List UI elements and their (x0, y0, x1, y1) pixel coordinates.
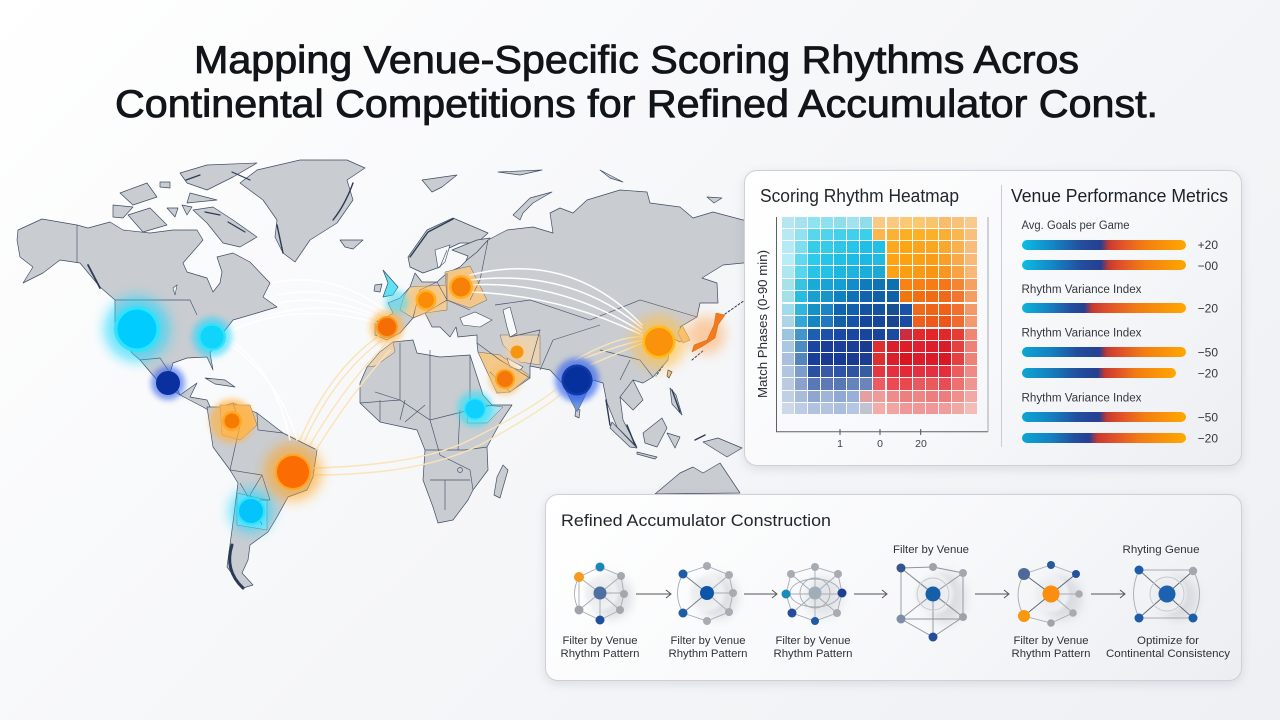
metric bar: avg goals 1 (1022, 240, 1186, 250)
metric bar: rhythm variance 4 (1022, 412, 1186, 422)
marker: India (555, 358, 599, 402)
step labels: Filter by Venue (1014, 635, 1088, 647)
heatmap axis tick labels: 0 (877, 438, 883, 450)
metric labels (1022, 220, 1142, 404)
heading: venue performance metrics: Venue Performance Metrics (1011, 186, 1228, 206)
marker: eastern USA (192, 317, 232, 357)
marker: Argentina (229, 489, 273, 533)
network icon 3 (782, 563, 846, 625)
step labels: Rhythm Pattern (774, 648, 852, 660)
marker: Brazil (264, 443, 322, 501)
marker: Poland (446, 272, 476, 302)
heatmap grid (782, 217, 977, 414)
network icon 1 (574, 562, 632, 624)
heatmap y axis label: Match Phases (0-90 min) (756, 250, 770, 398)
marker: Ethiopia (457, 391, 493, 427)
title: Mapping Venue-Specific Scoring Rhythms Acros (194, 39, 1079, 82)
marker: Iran (505, 340, 529, 364)
title: Continental Competitions for Refined Accumulator Const. (115, 83, 1158, 126)
metric values: −50 (1198, 410, 1218, 424)
network icon 5 (1018, 561, 1083, 627)
heatmap axis tick labels: 1 (837, 438, 843, 450)
arrow 5 (1091, 590, 1125, 598)
metric labels: Rhythm Variance Index (1022, 328, 1142, 340)
marker: United Kingdom and France glow (385, 290, 409, 314)
step labels: Continental Consistency (1106, 648, 1231, 660)
metric values: −50 (1198, 346, 1218, 360)
title (115, 39, 1158, 126)
metric bar: rhythm variance 3 (1022, 368, 1176, 378)
marker: Colombia (210, 399, 254, 443)
metric values: −20 (1198, 366, 1218, 380)
panel divider (1000, 185, 1002, 447)
dark detailed coastlines (88, 172, 745, 588)
arrow 2 (744, 590, 777, 598)
network icon 4 (896, 563, 967, 642)
metric values: −20 (1198, 302, 1218, 316)
metric labels: Avg. Goals per Game (1022, 220, 1130, 232)
step labels: Rhythm Pattern (668, 648, 748, 660)
metric values (1198, 238, 1218, 446)
marker: Spain (370, 310, 404, 344)
metric bar: rhythm variance 1 (1022, 303, 1186, 313)
metric bar: avg goals 2 (1022, 260, 1186, 270)
step labels: Rhyting Genue (1122, 544, 1200, 556)
heading: scoring rhythm heatmap: Scoring Rhythm Heatmap (760, 186, 959, 206)
step labels: Optimize for (1137, 635, 1199, 647)
step labels: Rhythm Pattern (560, 648, 640, 660)
metric bar: rhythm variance 2 (1022, 347, 1186, 357)
metric values: −00 (1198, 259, 1218, 273)
country borders (77, 225, 697, 525)
step labels (560, 544, 1231, 660)
land masses (17, 160, 760, 588)
marker: Japan (687, 313, 725, 354)
marker: China (632, 315, 686, 369)
venue markers (104, 272, 725, 533)
arrow 1 (636, 590, 671, 598)
arrow 4 (975, 590, 1009, 598)
step labels: Filter by Venue (562, 635, 638, 647)
network icon 2 (678, 562, 738, 625)
marker: Saudi Arabia (489, 363, 521, 395)
marker: Mexico (151, 366, 185, 400)
network icon 6 (1134, 566, 1200, 622)
route arcs (228, 269, 643, 475)
heatmap axes (776, 217, 988, 435)
metric labels: Rhythm Variance Index (1022, 392, 1142, 404)
heading: refined accumulator construction: Refined Accumulator Construction (561, 511, 831, 530)
marker: Germany (411, 285, 441, 315)
panel: refined accumulator construction (545, 494, 1242, 681)
inland seas (173, 245, 523, 370)
step labels: Filter by Venue (776, 635, 850, 647)
arrow 3 (854, 590, 887, 598)
panel: scoring rhythm heatmap and venue metrics (744, 170, 1242, 466)
tinted regions around venues (220, 266, 690, 530)
metric values: −20 (1198, 432, 1218, 446)
metric values: +20 (1198, 238, 1218, 252)
step labels: Rhythm Pattern (1012, 648, 1090, 660)
step labels: Filter by Venue (670, 635, 746, 647)
metric bar: rhythm variance 5 (1022, 433, 1186, 443)
step labels: Filter by Venue (893, 544, 969, 556)
heatmap axis tick labels (837, 438, 927, 450)
marker: western USA (104, 296, 170, 362)
heatmap axis tick labels: 20 (915, 438, 927, 450)
metric labels: Rhythm Variance Index (1022, 284, 1142, 296)
